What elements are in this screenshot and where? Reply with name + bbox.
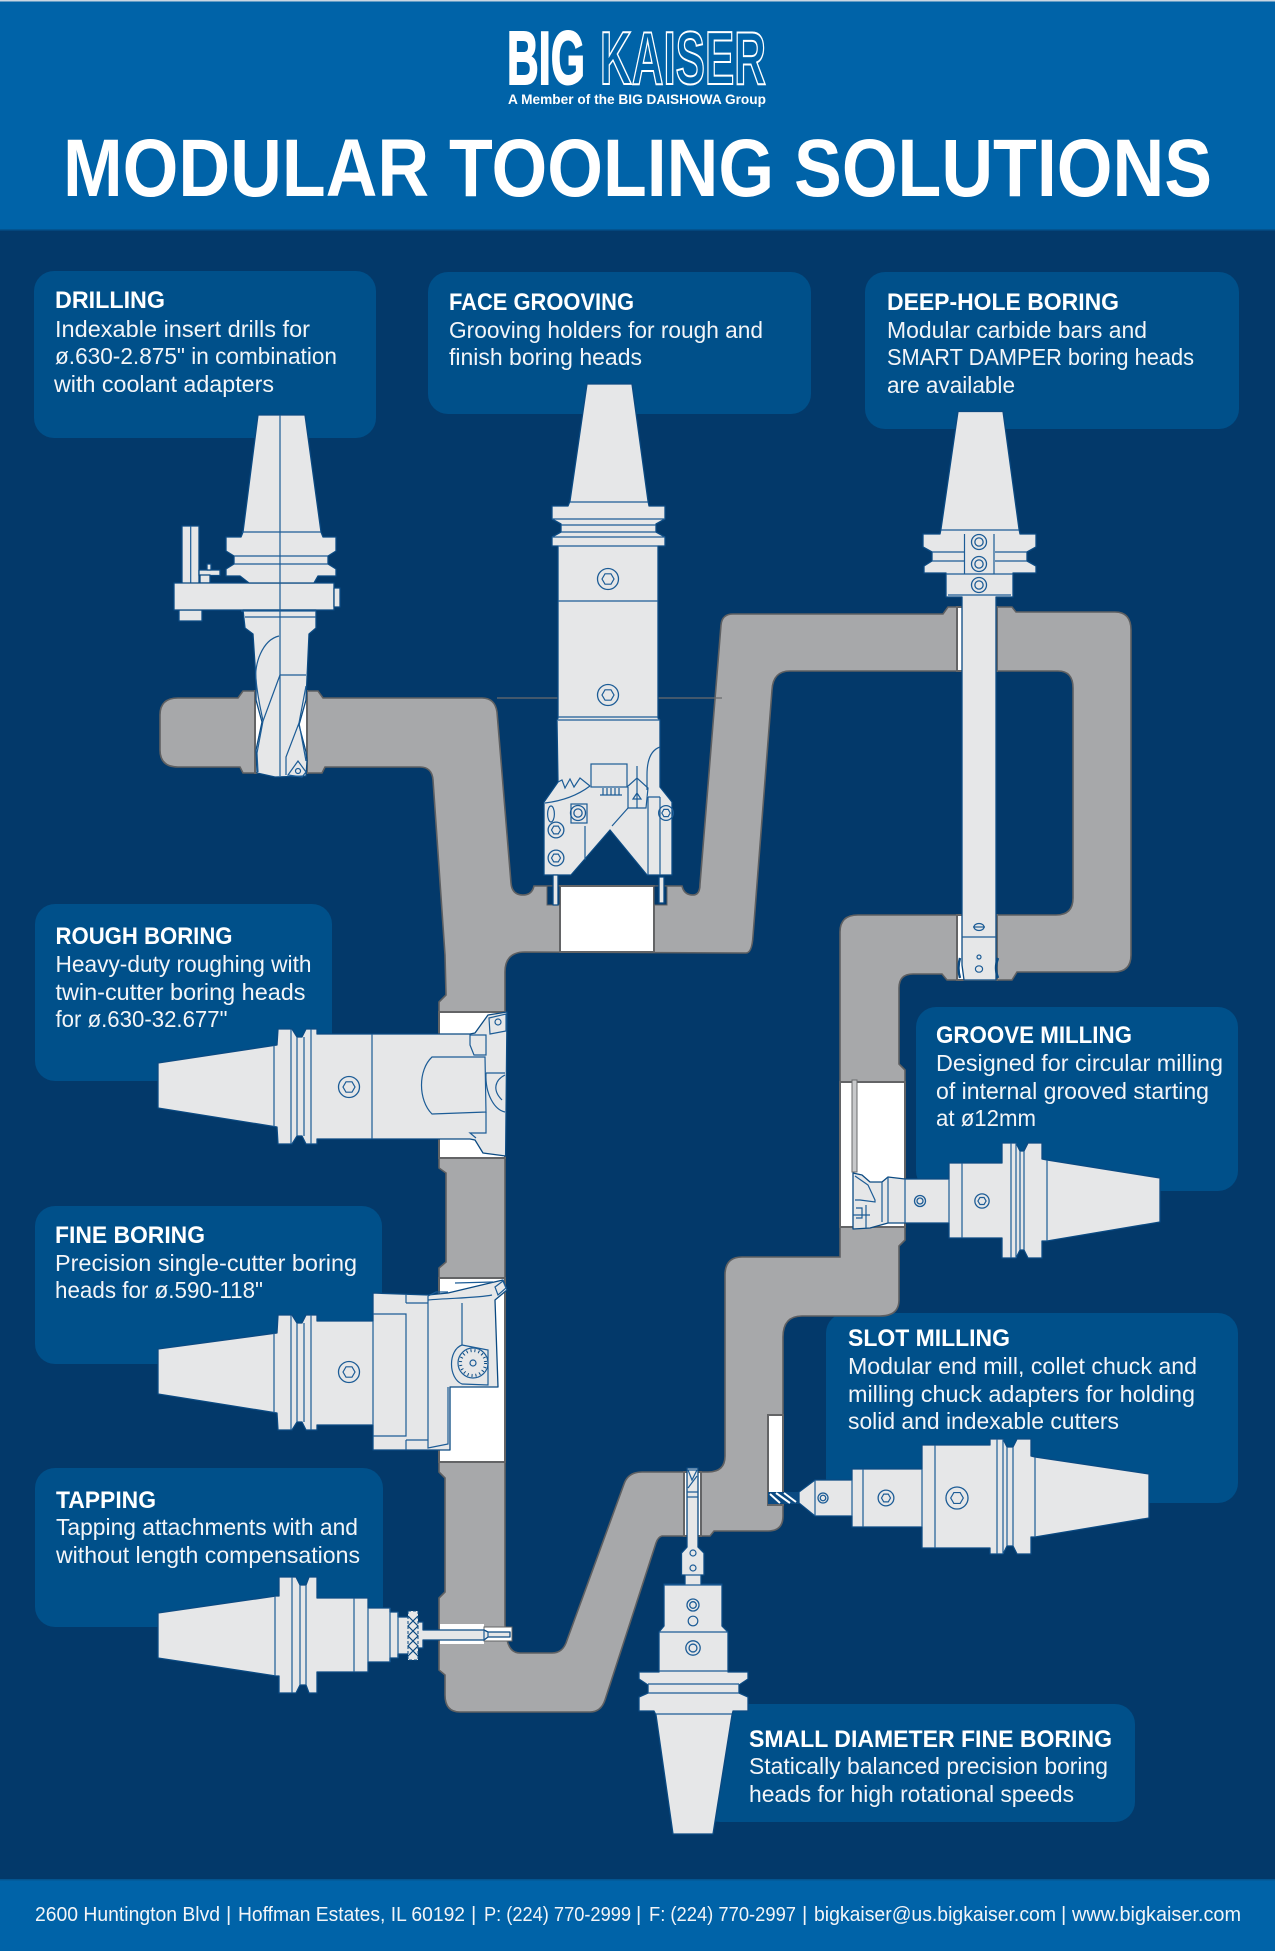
panel: tapping: without length compensations xyxy=(55,1542,360,1568)
panel: rough boring xyxy=(35,904,332,1081)
contact details: | xyxy=(636,1903,641,1926)
panel: groove milling: at ø12mm xyxy=(936,1105,1036,1131)
face grooving blade pins xyxy=(553,875,664,905)
tool: slot milling xyxy=(768,1439,1149,1554)
white windows xyxy=(255,607,997,1536)
tool: deep-hole boring xyxy=(923,412,1036,980)
contact details: | xyxy=(471,1903,476,1926)
panel: small diameter fine boring: heads for high rotational speeds xyxy=(749,1781,1074,1807)
panel: face grooving xyxy=(428,272,811,414)
tapping details xyxy=(275,1577,488,1693)
face grooving detail lines xyxy=(545,502,673,875)
panel: rough boring: ROUGH BORING xyxy=(56,923,232,950)
tool: face grooving xyxy=(544,384,673,905)
tool: rough boring xyxy=(158,1012,507,1156)
panel: tapping: TAPPING xyxy=(56,1487,156,1514)
small diameter details xyxy=(648,1470,739,1714)
deep-hole boring details xyxy=(932,530,1027,978)
contact details: www.bigkaiser.com xyxy=(1071,1903,1241,1926)
panel: slot milling: solid and indexable cutters xyxy=(848,1408,1119,1434)
panel: slot milling xyxy=(826,1313,1238,1503)
contact details: | xyxy=(802,1903,807,1926)
panel: face grooving: finish boring heads xyxy=(449,344,642,370)
panel: drilling: with coolant adapters xyxy=(53,371,274,397)
panel: small diameter fine boring: Statically balanced precision boring xyxy=(749,1753,1108,1779)
panel: slot milling: SLOT MILLING xyxy=(848,1325,1010,1352)
panel: drilling: DRILLING xyxy=(55,287,165,314)
contact details: 2600 Huntington Blvd xyxy=(35,1903,220,1926)
panel: deep-hole boring: Modular carbide bars and xyxy=(887,317,1147,343)
header band xyxy=(0,0,1275,230)
panel: drilling xyxy=(34,271,376,438)
contact details: | xyxy=(1061,1903,1066,1926)
logo: BIG KAISER: BIG xyxy=(507,16,585,100)
logo: BIG KAISER xyxy=(507,16,766,107)
footer band xyxy=(0,1879,1275,1951)
coolant adapter bracket xyxy=(174,526,340,621)
panel: deep-hole boring: DEEP-HOLE BORING xyxy=(887,289,1119,316)
drill lines xyxy=(234,415,328,777)
panel: slot milling: Modular end mill, collet chuck and xyxy=(848,1353,1197,1379)
panel: rough boring: for ø.630-32.677" xyxy=(56,1006,228,1032)
rough boring details xyxy=(274,1014,506,1144)
panel: tapping xyxy=(35,1468,383,1627)
panel: groove milling: GROOVE MILLING xyxy=(936,1022,1132,1049)
panel: tapping: Tapping attachments with and xyxy=(56,1514,358,1540)
slot milling details xyxy=(815,1439,1035,1554)
fine boring details xyxy=(274,1281,506,1450)
groove milling details xyxy=(853,1143,1047,1258)
end mill cutter xyxy=(768,1492,799,1504)
panel: deep-hole boring: are available xyxy=(887,372,1015,398)
contact details: F: (224) 770-2997 xyxy=(649,1903,796,1926)
panel: small diameter fine boring xyxy=(700,1704,1135,1822)
tool: tapping xyxy=(158,1577,512,1693)
panel: fine boring: FINE BORING xyxy=(55,1222,205,1249)
seam line xyxy=(497,697,722,699)
tool: drilling xyxy=(174,415,340,777)
contact details: P: (224) 770-2999 xyxy=(484,1903,631,1926)
tool: groove milling xyxy=(853,1143,1160,1258)
contact details: | xyxy=(226,1903,231,1926)
workpiece: gray duct with machined windows xyxy=(160,607,1131,1712)
panel: drilling: ø.630-2.875" in combination xyxy=(55,343,337,369)
panel: face grooving: FACE GROOVING xyxy=(449,289,634,316)
panel: deep-hole boring xyxy=(865,272,1239,429)
contact details: Hoffman Estates, IL 60192 xyxy=(238,1903,465,1926)
panel: small diameter fine boring: SMALL DIAMETER FINE BORING xyxy=(749,1726,1112,1753)
tool: small diameter fine boring xyxy=(639,1468,748,1834)
panel: face grooving: Grooving holders for rough and xyxy=(449,317,763,343)
panel: groove milling xyxy=(916,1007,1238,1191)
contact details: bigkaiser@us.bigkaiser.com xyxy=(814,1903,1056,1926)
panel: deep-hole boring: SMART DAMPER boring heads xyxy=(887,344,1194,370)
panel: drilling: Indexable insert drills for xyxy=(55,316,310,342)
contact details xyxy=(35,1903,1241,1926)
panel: groove milling: Designed for circular milling xyxy=(936,1050,1223,1076)
tool pockets beside bore xyxy=(547,886,667,905)
panel: rough boring: twin-cutter boring heads xyxy=(56,979,306,1005)
panel: fine boring xyxy=(35,1206,382,1364)
logo: BIG KAISER: A Member of the BIG DAISHOWA Group xyxy=(508,91,766,107)
panel: fine boring: Precision single-cutter boring xyxy=(55,1250,357,1276)
tool: fine boring xyxy=(158,1280,507,1450)
panel: slot milling: milling chuck adapters for holding xyxy=(848,1381,1195,1407)
logo: BIG KAISER: KAISER xyxy=(600,16,766,100)
panel: fine boring: heads for ø.590-118" xyxy=(55,1277,263,1303)
panel: rough boring: Heavy-duty roughing with xyxy=(56,951,312,977)
panel: groove milling: of internal grooved starting xyxy=(936,1078,1209,1104)
